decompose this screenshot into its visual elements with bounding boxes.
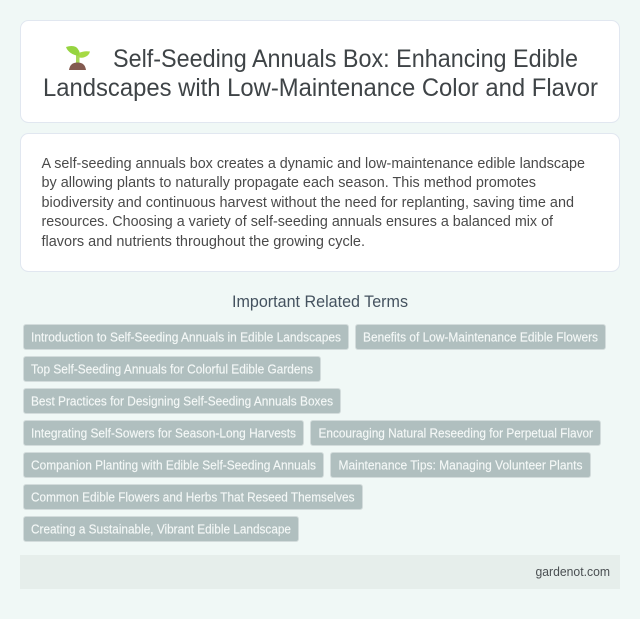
tag: top annuals: Top Self-Seeding Annuals for Colorful Edible Gardens [31,362,313,376]
tag: best practices [24,388,340,414]
description text: biodiversity and continuous harvest without the need for replanting, saving time and [42,195,574,211]
description text: resources. Choosing a variety of self-seeding annuals ensures a balanced mix of [42,214,554,230]
tag: maintenance [330,452,590,478]
title heading: Landscapes with Low-Maintenance Color and Flavor [43,75,598,102]
tag: companion planting [24,452,324,478]
tag: introduction: Introduction to Self-Seeding Annuals in Edible Landscapes [31,330,341,344]
tag list [24,324,606,542]
description text: A self-seeding annuals box creates a dynamic and low-maintenance edible landscape [42,156,585,172]
tag: sustainable landscape [24,516,298,542]
description text: by allowing plants to naturally propagate each season. This method promotes [42,175,536,191]
footer bar [20,555,620,589]
title heading: Self-Seeding Annuals Box: Enhancing Edible [113,46,578,73]
tag: companion planting: Companion Planting with Edible Self-Seeding Annuals [31,458,316,472]
footer source text: gardenot.com [536,564,610,579]
tag: benefits [356,324,606,350]
icon: seedling [66,46,90,70]
panel: description card [20,134,620,272]
tag: benefits: Benefits of Low-Maintenance Edible Flowers [363,330,598,344]
title heading [43,46,598,102]
tag: best practices: Best Practices for Designing Self-Seeding Annuals Boxes [31,394,333,408]
tag: sustainable landscape: Creating a Sustainable, Vibrant Edible Landscape [31,522,291,536]
panel: title card [20,20,620,122]
description text [42,156,585,250]
tag: encouraging [310,420,600,446]
description text: flavors and nutrients throughout the growing cycle. [42,234,365,250]
tag: encouraging: Encouraging Natural Reseeding for Perpetual Flavor [318,426,594,440]
tag: common flowers [24,484,362,510]
tag: introduction [24,324,348,350]
tag: common flowers: Common Edible Flowers and Herbs That Reseed Themselves [31,490,355,504]
tag: integrating [24,420,304,446]
tag: top annuals [24,356,320,382]
tag: integrating: Integrating Self-Sowers for Season-Long Harvests [31,426,296,440]
tag: maintenance: Maintenance Tips: Managing Volunteer Plants [338,458,583,472]
heading: important related terms: Important Related Terms [232,293,408,311]
